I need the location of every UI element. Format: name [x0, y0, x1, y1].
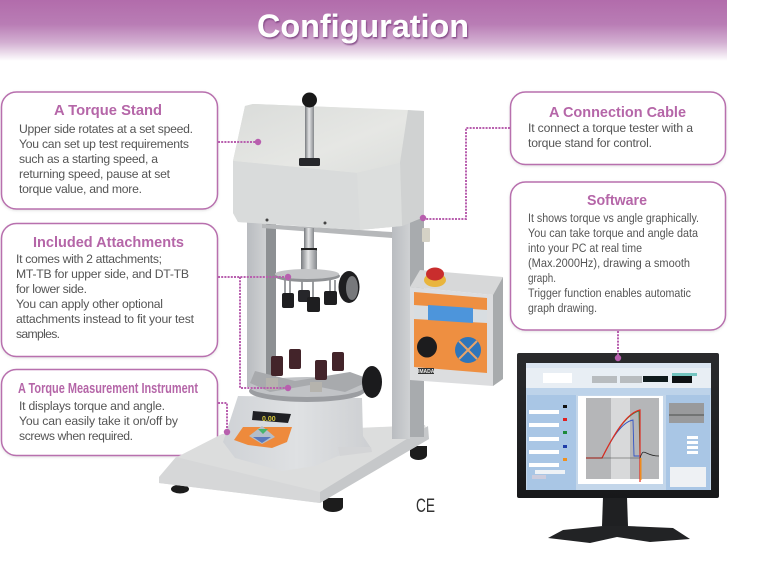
control box orange panel [414, 292, 487, 373]
monitor [517, 353, 719, 543]
panel: a connection cable [510, 92, 726, 164]
text: torque stand description: You can set up test requirements [19, 137, 189, 151]
text: software description [528, 211, 699, 315]
text: instrument description [19, 399, 179, 443]
monitor screen [526, 363, 711, 490]
text: instrument description: You can easily take it on/off by [19, 414, 179, 428]
cross beam [262, 224, 392, 238]
title: Configuration [257, 8, 469, 44]
text: software description: into your PC at real time [528, 241, 642, 255]
text: software description: (Max.2000Hz), drawing a smooth [528, 256, 690, 270]
text: instrument description: It displays torque and angle. [19, 399, 165, 413]
text: attachments description: MT-TB for upper side, and DT-TB [16, 267, 189, 281]
text: software description: graph. [528, 271, 556, 285]
connector: software [615, 331, 621, 361]
heading: a connection cable: A Connection Cable [549, 104, 686, 121]
connector: attachments [218, 274, 291, 391]
monitor bezel [517, 353, 719, 498]
torque instrument [223, 396, 372, 471]
text: attachments description: It comes with 2 attachments; [16, 252, 162, 266]
software left panel [527, 395, 576, 490]
panel: a torque measurement instrument [2, 370, 218, 456]
text: attachments description: You can apply other optional [16, 297, 163, 311]
torque angle graph [578, 396, 663, 484]
control box: IMADA [418, 369, 435, 375]
control buttons [455, 337, 481, 363]
text: torque stand description: such as a starting speed, a [19, 152, 158, 166]
upper attachment [274, 269, 360, 312]
lower attachment [249, 349, 382, 402]
instrument display [252, 411, 291, 423]
text: software description: You can take torque and angle data [528, 226, 698, 240]
emergency stop button [424, 268, 446, 287]
right column [392, 215, 430, 439]
base plate [159, 425, 429, 512]
heading: a torque stand: A Torque Stand [54, 102, 162, 119]
connector: torque stand [218, 139, 261, 145]
text: instrument description: screws when required. [19, 429, 133, 443]
text: cable description [528, 121, 693, 150]
heading: included attachments: Included Attachments [33, 234, 184, 251]
text: attachments description: for lower side. [16, 282, 87, 296]
connector: connection cable [420, 128, 510, 221]
brand plate [418, 368, 434, 374]
panel: included attachments [2, 224, 218, 356]
text: torque stand description [19, 122, 193, 196]
text: cable description: torque stand for control. [528, 136, 652, 150]
heading: software: Software [587, 192, 647, 209]
text: attachments description: samples. [16, 327, 60, 341]
panel: a torque stand [2, 92, 218, 209]
control box [410, 268, 503, 386]
torque stand machine [159, 92, 503, 512]
heading: a torque measurement instrument: A Torque Measurement Instrument [18, 380, 198, 397]
header banner [0, 0, 727, 61]
text: torque stand description: Upper side rotates at a set speed. [19, 122, 193, 136]
connector: instrument [218, 403, 230, 435]
left column [247, 222, 276, 387]
instrument orange keypad [234, 427, 292, 448]
CE mark: CE [416, 496, 435, 517]
control dial [417, 336, 437, 358]
top handle [299, 92, 320, 166]
text: software description: It shows torque vs angle graphically. [528, 211, 699, 225]
software right panel [666, 395, 710, 490]
text: attachments description [16, 252, 195, 341]
panel: software [510, 182, 726, 330]
text: torque stand description: returning speed, pause at set [19, 167, 171, 181]
rotating shaft [301, 228, 317, 272]
text: software description: graph drawing. [528, 301, 597, 315]
text: attachments description: attachments instead to fit your test [16, 312, 195, 326]
monitor stand [548, 497, 690, 543]
text: software description: Trigger function enables automatic [528, 286, 691, 300]
text: cable description: It connect a torque tester with a [528, 121, 693, 135]
torque instrument: 0.00 [262, 416, 276, 423]
stand housing [233, 104, 424, 230]
text: torque stand description: torque value, and more. [19, 182, 142, 196]
